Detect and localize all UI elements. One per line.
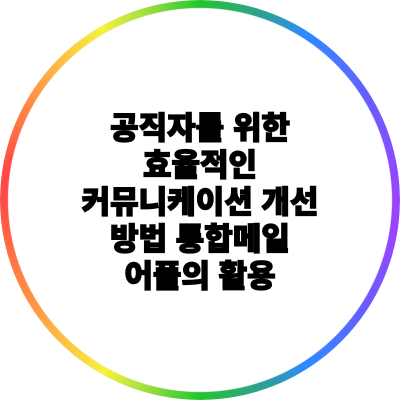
title: 방법 통합메일 xyxy=(110,222,290,257)
title: 효율적인 xyxy=(143,148,257,183)
title xyxy=(81,111,318,294)
title: 어플의 활용 xyxy=(124,259,276,294)
title: 커뮤니케이션 개선 xyxy=(82,185,318,220)
title: 공직자를 위한 xyxy=(110,111,290,146)
